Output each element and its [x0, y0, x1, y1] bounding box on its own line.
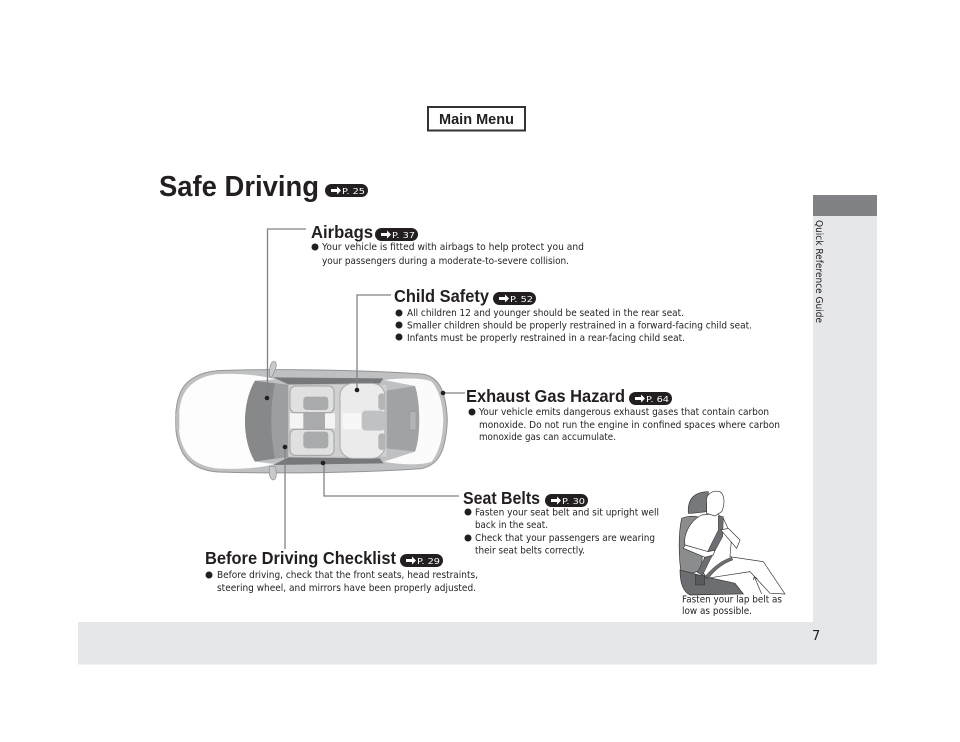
section: seat belts: Check that your passengers are wearing — [475, 533, 655, 544]
seat belt illustration — [679, 491, 785, 595]
section: exhaust gas hazard: Your vehicle emits dangerous exhaust gases that contain carbon — [478, 407, 769, 418]
section: seat belts: back in the seat. — [475, 520, 548, 531]
section: seat belts — [463, 488, 659, 556]
section: airbags: Airbags — [311, 222, 373, 242]
section: seat belts: Seat Belts — [463, 488, 540, 508]
section: before driving checklist: steering wheel, and mirrors have been properly adjusted. — [217, 583, 476, 594]
section: seat belts: P. 30 — [562, 497, 585, 506]
connector: seat belts — [321, 461, 459, 496]
section: before driving checklist: P. 29 — [417, 557, 440, 566]
section: exhaust gas hazard: monoxide. Do not run the engine in confined spaces where carbon — [479, 420, 780, 431]
section: child safety — [394, 286, 752, 344]
section: exhaust gas hazard: monoxide gas can accumulate. — [479, 432, 616, 443]
section: before driving checklist: Before Driving Checklist — [205, 548, 396, 568]
seat belt caption: low as possible. — [682, 606, 752, 617]
section: child safety: Infants must be properly restrained in a rear-facing child seat. — [407, 333, 685, 344]
section: airbags: your passengers during a moderate-to-severe collision. — [322, 256, 569, 267]
main menu button: Main Menu — [439, 112, 514, 128]
section: child safety: Smaller children should be properly restrained in a forward-facing child seat. — [407, 320, 752, 332]
bottom band — [78, 622, 877, 664]
section: airbags: Your vehicle is fitted with airbags to help protect you and — [321, 242, 584, 253]
seat belt caption — [682, 594, 782, 617]
section: airbags — [311, 222, 584, 267]
title: P. 25 — [342, 187, 365, 196]
section: airbags: P. 37 — [392, 231, 415, 240]
seat belt caption: Fasten your lap belt as — [682, 594, 782, 606]
car top view — [175, 362, 447, 480]
section: before driving checklist — [205, 548, 478, 594]
connector: child safety — [355, 295, 391, 392]
section: child safety: All children 12 and younger should be seated in the rear seat. — [407, 308, 684, 319]
title: Safe Driving — [159, 171, 319, 203]
main menu button — [428, 107, 525, 130]
connector: before driving — [283, 445, 287, 549]
connector: exhaust — [441, 391, 465, 395]
section: exhaust gas hazard — [466, 386, 780, 443]
sidebar panel: Quick Reference Guide — [813, 220, 824, 323]
section: child safety: P. 52 — [510, 295, 533, 304]
section: seat belts: Fasten your seat belt and sit upright well — [475, 508, 659, 518]
page number: 7 — [812, 629, 820, 644]
section: exhaust gas hazard: P. 64 — [646, 395, 669, 404]
section: before driving checklist: Before driving, check that the front seats, head restraints, — [217, 570, 478, 581]
section: seat belts: their seat belts correctly. — [475, 546, 585, 556]
sidebar panel — [813, 195, 877, 623]
connector: airbags — [265, 229, 306, 400]
section: child safety: Child Safety — [394, 286, 489, 306]
section: exhaust gas hazard: Exhaust Gas Hazard — [466, 386, 625, 406]
